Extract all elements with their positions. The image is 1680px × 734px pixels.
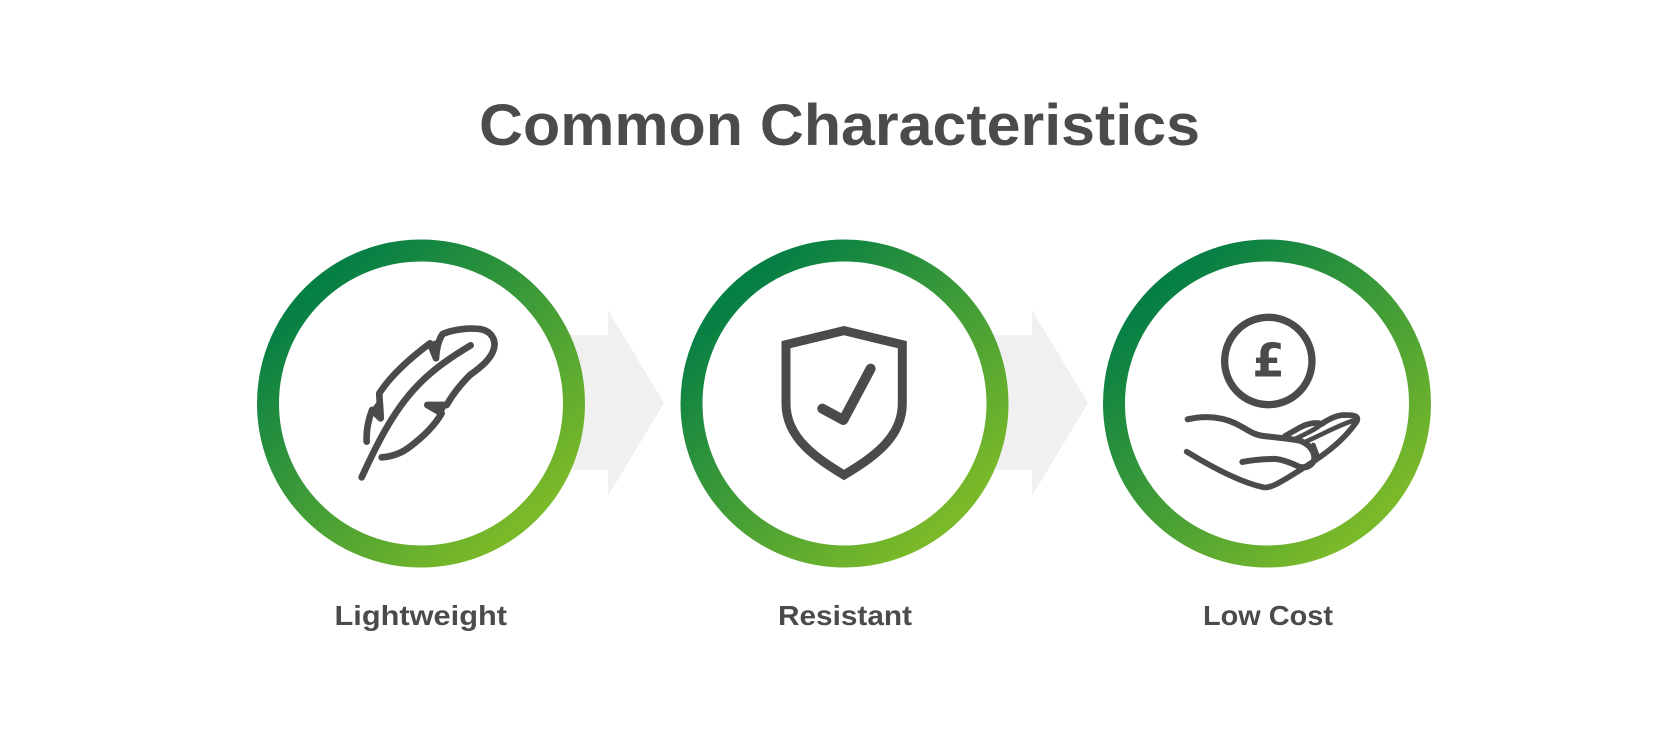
label: lightweight: Lightweight [334, 600, 507, 631]
icon: coin [1225, 317, 1312, 405]
ring: resistant [692, 250, 998, 556]
panel: low cost [1114, 250, 1420, 631]
icon: coin: £ [1252, 335, 1285, 389]
icon: open hand [1187, 415, 1357, 487]
label: low cost: Low Cost [1203, 600, 1333, 631]
title: Common Characteristics [479, 93, 1200, 158]
arrow: lightweight to resistant [540, 310, 664, 496]
icon: shield with check [786, 331, 902, 475]
panel: resistant [692, 250, 998, 631]
icon: feather [362, 329, 494, 477]
label: resistant: Resistant [778, 600, 912, 631]
ring: lightweight [268, 250, 574, 556]
ring: low cost [1114, 250, 1420, 556]
panel: lightweight [268, 250, 574, 631]
arrow: resistant to low cost [964, 310, 1088, 496]
